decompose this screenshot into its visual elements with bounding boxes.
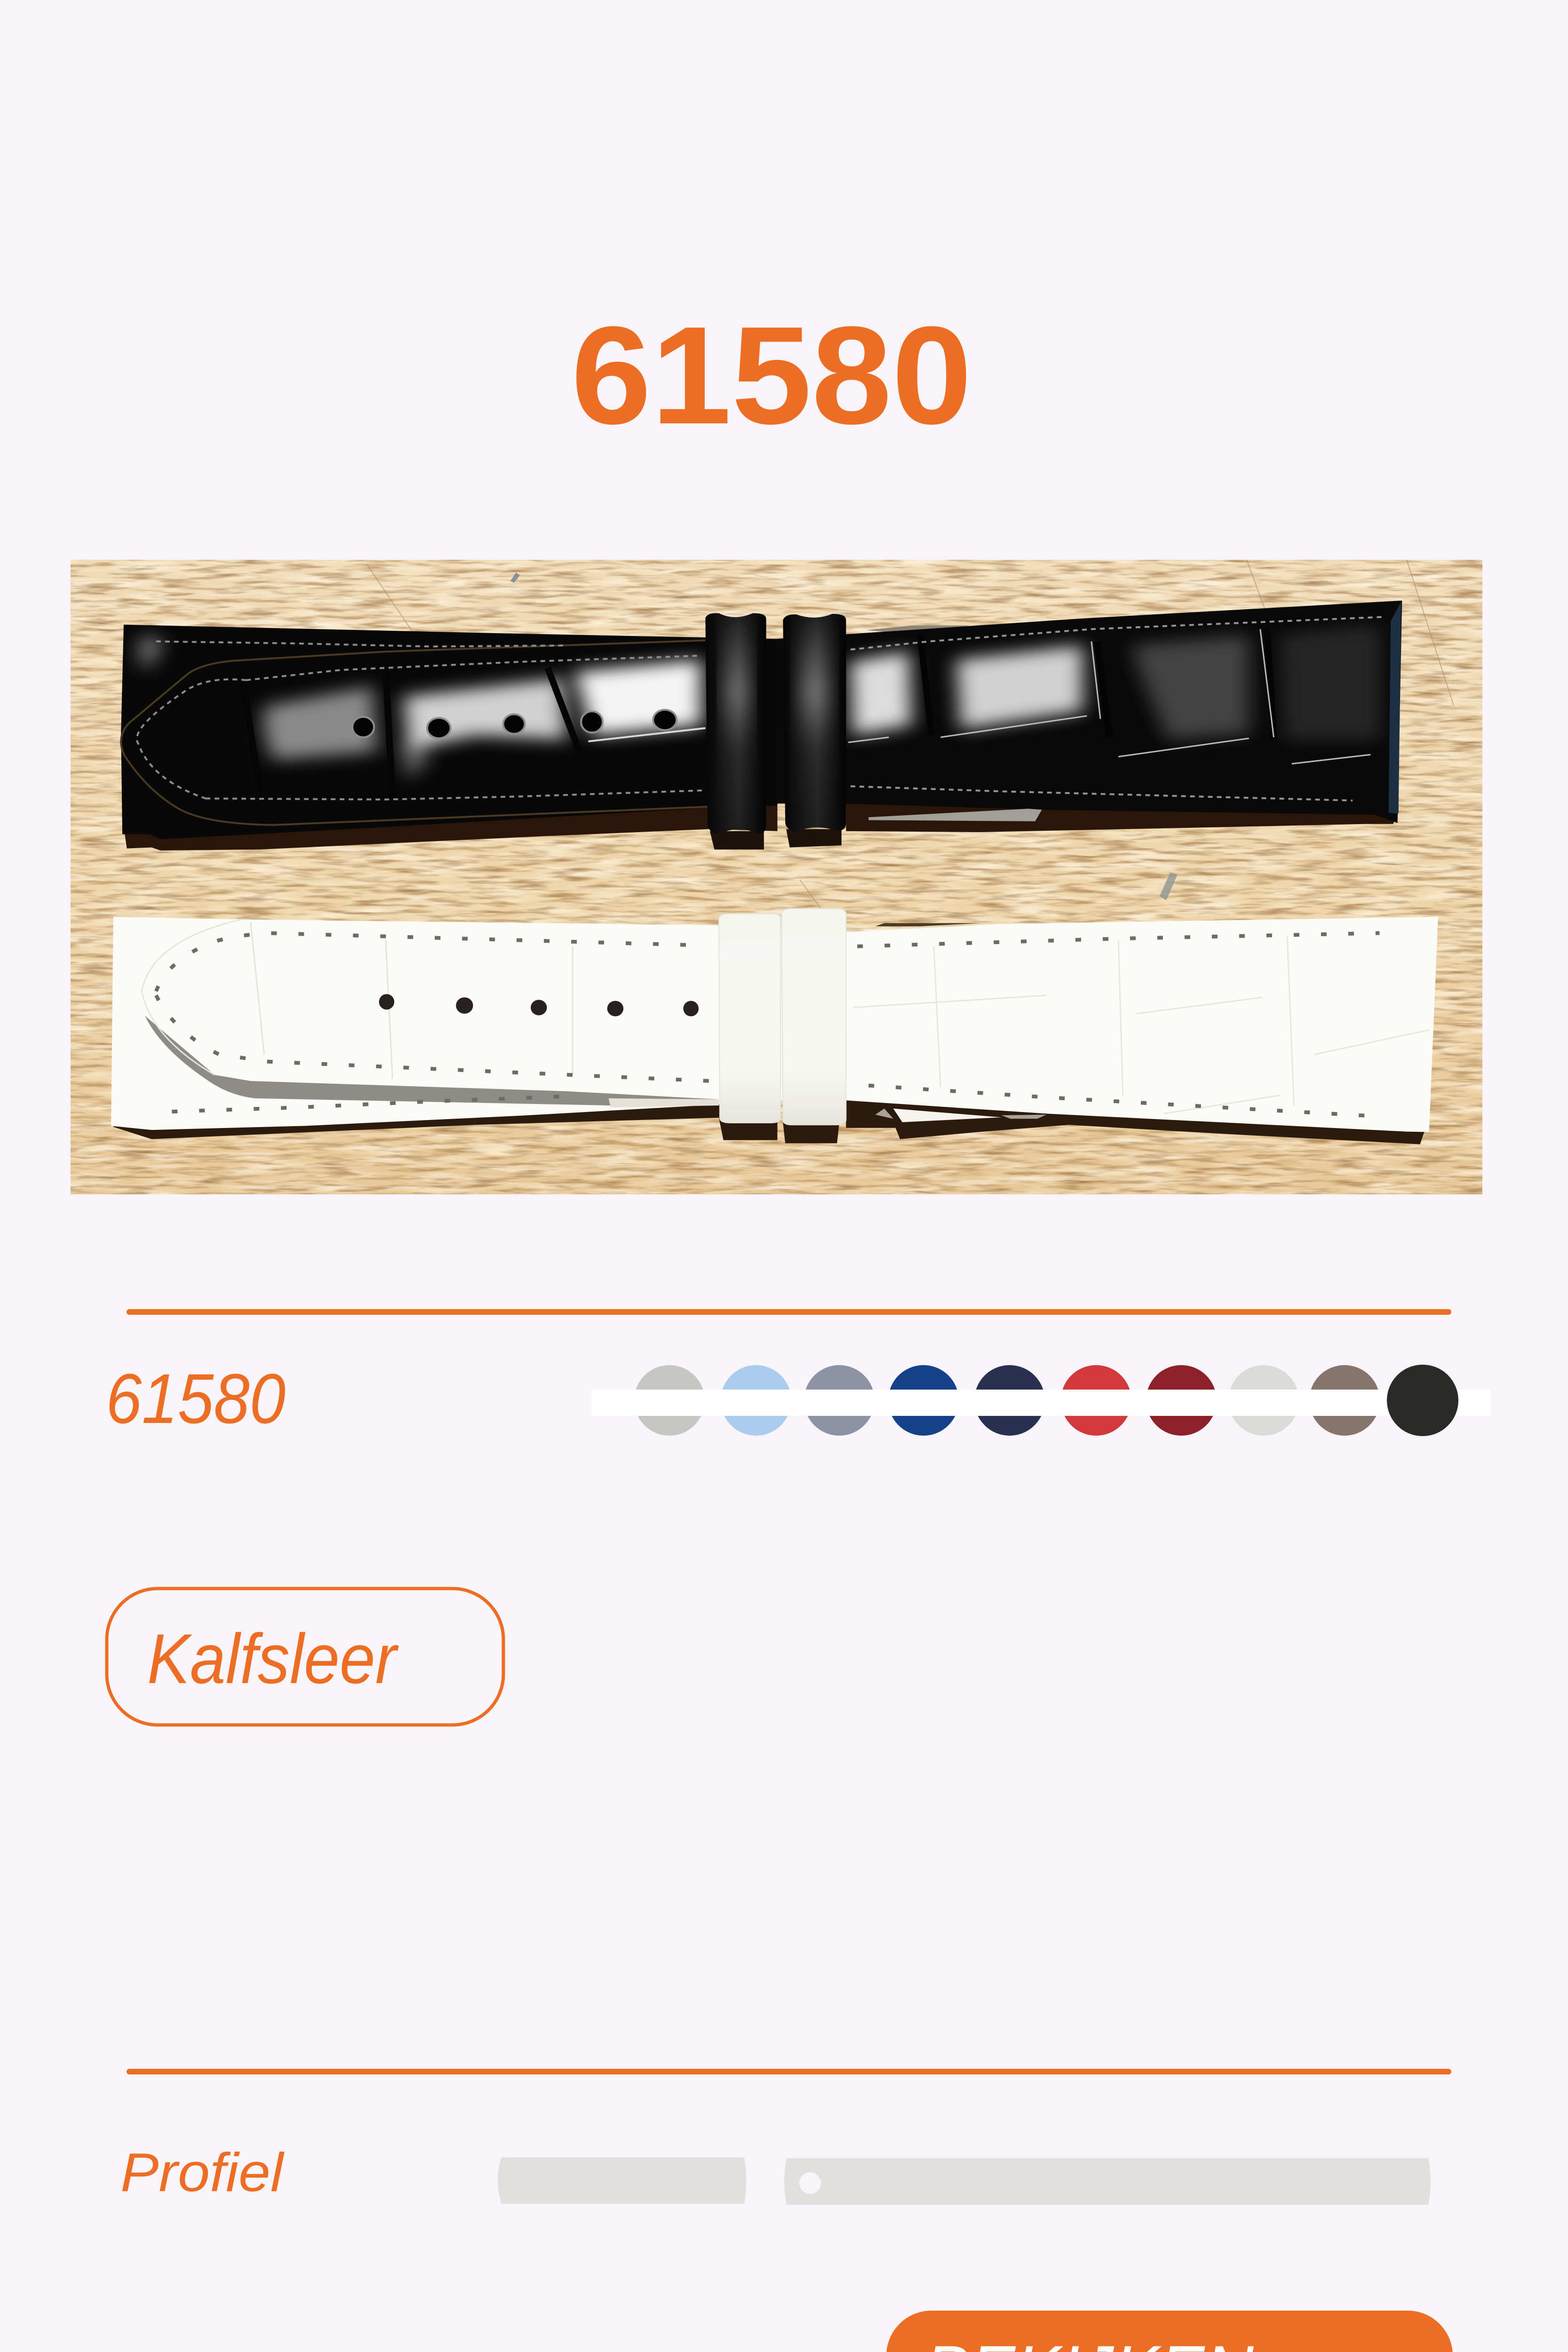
profile label: Profiel [120, 2142, 285, 2203]
colour swatches [591, 1365, 1491, 1436]
divider top [127, 1309, 1451, 1315]
left half [111, 917, 777, 1140]
product code label: 61580 [106, 1359, 286, 1438]
title: 61580 [571, 297, 972, 453]
right half [775, 917, 1438, 1144]
material tag [107, 1589, 503, 1725]
black strap [121, 601, 1402, 850]
view button [886, 2311, 1453, 2352]
profile bars [498, 2157, 1431, 2205]
strap keepers [719, 914, 780, 1123]
divider bottom [127, 2069, 1451, 2074]
strap keepers [705, 613, 766, 850]
material tag: Kalfsleer [147, 1619, 399, 1698]
white strap [111, 909, 1438, 1144]
left half [121, 625, 777, 850]
right half [775, 601, 1402, 832]
product photo: two watch straps on wood [71, 560, 1482, 1194]
